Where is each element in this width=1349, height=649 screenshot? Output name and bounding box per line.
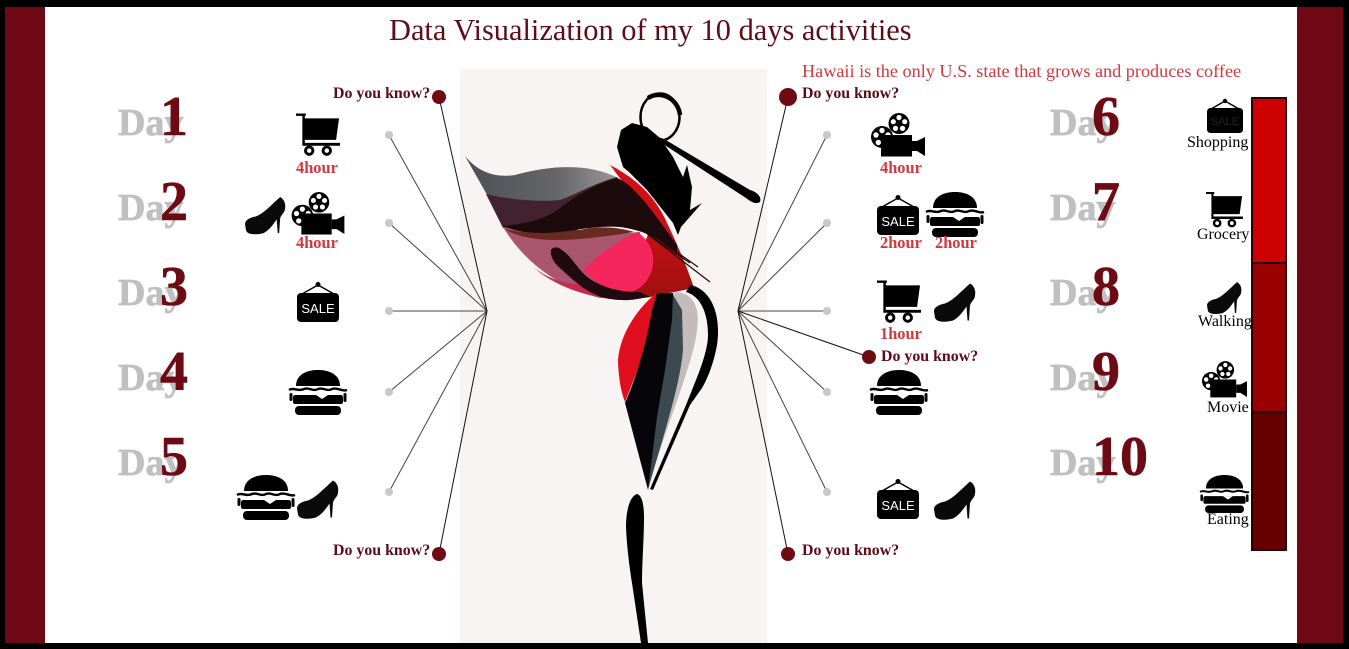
icons: days 1-5	[237, 113, 347, 520]
head and shoulders	[617, 123, 702, 235]
day labels right: Day	[1050, 187, 1115, 229]
wing: grey layer	[465, 156, 618, 205]
callouts: do you know	[333, 85, 978, 559]
leg brush stroke	[626, 494, 648, 643]
wing: mauve lower layer	[503, 227, 650, 298]
legend icons and labels: SALE	[1211, 116, 1239, 128]
artwork: abstract dancer figure	[465, 94, 760, 643]
day labels right: 6	[1092, 86, 1120, 148]
day labels left: Day	[118, 357, 183, 399]
icons: days 1-5: 4hour	[296, 158, 338, 177]
callouts: do you know: Do you know?	[881, 348, 978, 365]
wing: purple layer	[486, 177, 630, 240]
skirt: red	[618, 293, 665, 402]
legend icons and labels: Movie	[1207, 399, 1249, 416]
callouts: do you know: Do you know?	[802, 542, 899, 559]
skirt: light grey	[650, 292, 698, 480]
icons: days 6-10: SALE	[881, 498, 915, 513]
day labels right: 10	[1092, 426, 1148, 488]
wing: black brush stroke	[551, 247, 650, 300]
day labels right: Day	[1050, 442, 1115, 484]
day labels right	[1050, 86, 1148, 488]
day labels left: Day	[118, 442, 183, 484]
callouts: do you know: Do you know?	[333, 85, 430, 102]
day labels right: Day	[1050, 357, 1115, 399]
ring	[640, 94, 680, 140]
icons: days 6-10: 1hour	[880, 324, 922, 343]
icons: days 6-10: SALE	[881, 214, 915, 229]
day labels right: 9	[1092, 341, 1120, 403]
wing: lower pink layer	[533, 267, 640, 299]
right maroon band	[1297, 7, 1343, 643]
icons: days 1-5: SALE	[301, 301, 335, 316]
day labels right: Day	[1050, 272, 1115, 314]
grey node dots	[385, 131, 831, 496]
legend icons and labels: Eating	[1207, 511, 1249, 528]
wing: hot pink blob	[583, 232, 653, 292]
icons: days 1-5: 4hour	[296, 233, 338, 252]
skirt: slate	[648, 293, 683, 490]
callouts: do you know: Do you know?	[333, 542, 430, 559]
day labels left	[118, 86, 188, 488]
day labels right: Day	[1050, 102, 1115, 144]
stacked bar legend	[1252, 98, 1286, 550]
connector lines: right hub	[738, 97, 869, 554]
icons: days 6-10: 4hour	[880, 158, 922, 177]
day labels left: 1	[160, 86, 188, 148]
legend icons and labels: Walking	[1198, 313, 1252, 330]
wing: brown band	[505, 227, 634, 240]
day labels right: 8	[1092, 256, 1120, 318]
connector lines: left hub	[389, 97, 487, 554]
tail brush stroke	[650, 285, 718, 490]
day labels left: 5	[160, 426, 188, 488]
day labels left: Day	[118, 272, 183, 314]
day labels right: 7	[1092, 171, 1120, 233]
day labels left: Day	[118, 187, 183, 229]
wing: red feathers	[610, 165, 694, 300]
day labels left: 2	[160, 171, 188, 233]
stick	[658, 137, 760, 203]
legend icons and labels: Shopping	[1187, 134, 1248, 151]
icons: days 6-10: 2hour	[935, 233, 977, 252]
fact line: Hawaii is the only U.S. state that grows and produces coffee	[802, 61, 1241, 81]
title: Data Visualization of my 10 days activities	[389, 13, 912, 47]
skirt: black	[625, 293, 673, 490]
day labels left: Day	[118, 102, 183, 144]
icons: days 6-10	[870, 113, 984, 520]
day labels left: 3	[160, 256, 188, 318]
feather lines	[620, 213, 710, 282]
icons: days 6-10: 2hour	[880, 233, 922, 252]
legend icons and labels	[1187, 99, 1252, 528]
maroon node dots	[432, 88, 876, 561]
wing: dark swoosh	[503, 178, 677, 252]
central artwork panel	[460, 69, 767, 643]
callouts: do you know: Do you know?	[802, 85, 899, 102]
left maroon band	[5, 7, 45, 643]
day labels left: 4	[160, 341, 188, 403]
legend icons and labels: Grocery	[1197, 226, 1249, 243]
